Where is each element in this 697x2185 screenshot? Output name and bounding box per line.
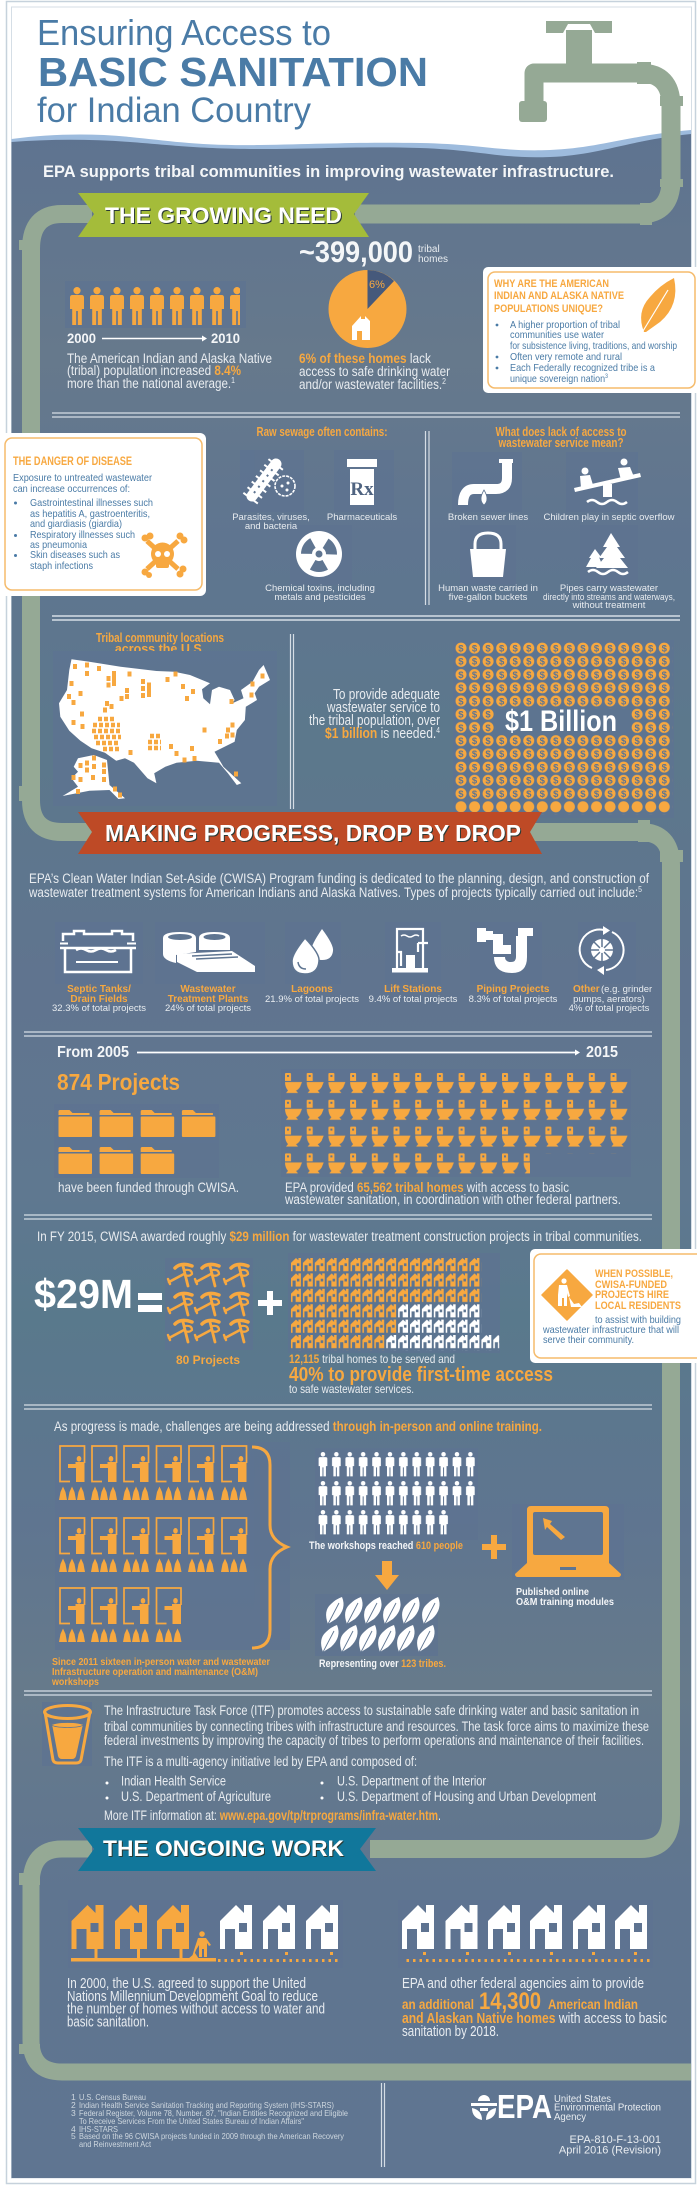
icon: parasites and viruses	[250, 460, 295, 499]
project type labels: Treatment Plants	[168, 994, 249, 1005]
project percentages: 24% of total projects	[165, 1003, 251, 1014]
service labels: Pipes carry wastewater	[560, 583, 658, 594]
banner: the ongoing work: THE ONGOING WORK	[103, 1836, 344, 1861]
icon: tools grid	[168, 1264, 248, 1342]
timeline 2000 to 2010: 2000	[67, 330, 96, 346]
title: for Indian Country	[37, 91, 311, 130]
text: one billion needed	[309, 687, 440, 742]
footnotes: Federal Register, Volume 78, Number. 87, "Indian Entities Recognized and Eligible	[79, 2108, 348, 2118]
ITF text: U.S. Department of the Interior	[337, 1774, 486, 1788]
text: one billion needed: 4	[436, 726, 440, 735]
icon: feather	[641, 278, 675, 332]
project types row	[52, 926, 652, 1014]
laptop caption: Published online	[516, 1586, 589, 1598]
2000 goal text: Nations Millennium Development Goal to reduce	[67, 1989, 318, 2005]
chart: one billion dollars: $$$$$$$$$$$$$$$$	[458, 776, 675, 787]
chart: one billion dollars: $$$$$$$$$$$$$$$$	[458, 749, 675, 760]
EPA logo: Agency	[554, 2112, 586, 2123]
service labels: Children play in septic overflow	[544, 512, 675, 523]
CWISA description	[28, 871, 649, 900]
chart: one billion dollars: $$$	[634, 723, 675, 734]
project percentages: 8.3% of total projects	[469, 994, 558, 1005]
project percentages: 32.3% of total projects	[52, 1003, 146, 1014]
callout: why unique	[483, 267, 697, 393]
document number: April 2016 (Revision)	[559, 2144, 661, 2156]
population text: 1	[231, 376, 235, 385]
ITF text: Indian Health Service	[121, 1774, 226, 1788]
65,562 homes: wastewater sanitation, in coordination with other federal partners.	[284, 1192, 621, 1207]
icon: skull and crossbones	[142, 532, 188, 578]
project type labels	[67, 984, 600, 1005]
EPA logo: Environmental Protection	[554, 2102, 661, 2114]
sewage labels: and bacteria	[245, 521, 298, 532]
icon: homes grid	[291, 1258, 499, 1350]
874 projects: have been funded through CWISA.	[58, 1179, 239, 1195]
disease text: staph infections	[30, 560, 93, 572]
callout: hire local residents: WHEN POSSIBLE,	[595, 1268, 673, 1280]
callout bullets: communities use water	[510, 329, 604, 341]
project type labels: Piping Projects	[477, 984, 550, 995]
workshop caption: workshops	[51, 1676, 99, 1688]
footnotes: 1	[71, 2092, 76, 2102]
workshop caption	[51, 1656, 270, 1688]
footnotes: IHS-STARS	[79, 2124, 118, 2134]
EPA logo: United States	[554, 2094, 611, 2105]
title	[37, 12, 428, 130]
14,300 homes panel	[402, 1905, 667, 2040]
footnotes: To Receive Services From the United States Bureau of Indian Affairs"	[79, 2116, 304, 2126]
workshop caption: Since 2011 sixteen in-person water and wastewater	[52, 1656, 270, 1668]
chart: one billion dollars: $$$	[458, 710, 499, 721]
disease text: Respiratory illnesses such	[30, 529, 135, 541]
65,562 homes: EPA provided 65,562 tribal homes with access to basic	[285, 1180, 569, 1195]
icon: glass of water	[44, 1706, 90, 1763]
project type labels: Drain Fields	[70, 994, 128, 1005]
EPA logo: EPA	[497, 2088, 552, 2125]
map of U.S.	[59, 659, 270, 799]
icon: construction sign	[542, 1270, 592, 1320]
equation: 29 million: $29M	[34, 1271, 133, 1317]
population text: more than the national average.	[67, 376, 258, 391]
sewage labels	[232, 512, 397, 603]
callout: hire local residents: LOCAL RESIDENTS	[595, 1300, 681, 1312]
icon: homes row	[402, 1905, 650, 1963]
callout bullets: Often very remote and rural	[510, 351, 622, 363]
panel: raw sewage contents: Raw sewage often contains:	[256, 425, 388, 439]
homes text: 2	[442, 377, 446, 386]
chart: one billion dollars: $$$	[458, 723, 499, 734]
icon: EPA symbol	[471, 2095, 497, 2120]
14,300 text: sanitation by 2018.	[402, 2024, 499, 2040]
training panel: The workshops reached 610 people	[309, 1540, 463, 1552]
14,300 text	[402, 1976, 667, 2040]
arrow down	[375, 1561, 399, 1590]
training panel	[51, 1418, 621, 1688]
65,562 homes	[284, 1073, 632, 1207]
brace	[252, 1447, 287, 1648]
callout heading: WHY ARE THE AMERICAN	[494, 278, 609, 290]
banner: the ongoing work	[78, 1828, 376, 1871]
footnotes: Indian Health Service Sanitation Tracking and Reporting System (IHS-STARS)	[79, 2100, 334, 2110]
callout: hire local residents: wastewater infrastructure that will	[542, 1324, 679, 1336]
icon: folders	[58, 1110, 215, 1174]
banner: the growing need	[78, 193, 369, 237]
homes text: and/or wastewater facilities.	[299, 377, 465, 392]
icon: people reached	[318, 1452, 479, 1536]
panel: lack of service: What does lack of access to	[496, 425, 627, 439]
icon: bucket	[470, 533, 506, 577]
icon: pine trees and stream	[586, 533, 628, 574]
disease text: can increase occurrences of:	[13, 483, 130, 495]
callout: danger of disease	[0, 433, 206, 596]
project percentages: 4% of total projects	[569, 1003, 650, 1014]
ITF text: U.S. Department of Housing and Urban Development	[337, 1789, 596, 1804]
project type labels: Other	[573, 984, 600, 995]
title: Ensuring Access to	[37, 12, 331, 53]
service labels: Broken sewer lines	[448, 512, 528, 523]
icon: pharmaceuticals bottle: Rx	[350, 479, 374, 500]
chart: one billion dollars: $$$$$$$$$$$$$$$$	[458, 736, 675, 747]
sewage labels: Chemical toxins, including	[265, 583, 375, 594]
laptop caption	[516, 1586, 614, 1608]
14,300 text: an additional	[402, 1996, 474, 2012]
icon: broken sewer	[463, 459, 513, 505]
project percentages: 9.4% of total projects	[369, 994, 458, 1005]
timeline 2005 to 2015: 2015	[586, 1044, 618, 1061]
workshop caption: Infrastructure operation and maintenance (O&M)	[52, 1666, 258, 1678]
population text: (tribal) population increased 8.4%	[67, 363, 241, 378]
sewage labels: Parasites, viruses,	[232, 512, 310, 523]
training panel: As progress is made, challenges are being addressed through in-person and online training.	[54, 1418, 542, 1434]
chart: one billion dollars	[455, 642, 675, 814]
text: one billion needed: $1 billion is needed.	[325, 726, 448, 742]
sewage labels: metals and pesticides	[274, 592, 366, 603]
callout bullets	[496, 319, 677, 385]
laptop caption: O&M training modules	[516, 1596, 614, 1608]
callout heading: INDIAN AND ALASKA NATIVE	[494, 290, 624, 302]
homes served text: 12,115 tribal homes to be served and	[289, 1352, 455, 1366]
training panel: Representing over 123 tribes.	[319, 1658, 446, 1670]
title: BASIC SANITATION	[38, 49, 428, 95]
equation: 29 million	[34, 1258, 553, 1396]
chart: one billion dollars: $$$$$$$$$$$$$$$$	[458, 657, 675, 668]
project percentages: 21.9% of total projects	[265, 994, 359, 1005]
service labels: without treatment	[572, 600, 646, 611]
ITF text: The ITF is a multi-agency initiative led by EPA and composed of:	[104, 1754, 417, 1769]
chart: one billion dollars: $1 Billion	[505, 705, 617, 738]
footnotes: 5	[71, 2131, 76, 2141]
document number	[559, 2134, 661, 2156]
chart: one billion dollars: $$$$$$$$$$$$$$$$	[458, 670, 675, 681]
14,300 text: and Alaskan Native homes with access to basic	[402, 2011, 667, 2027]
timeline 2005 to 2015	[57, 1044, 618, 1061]
2000 goal panel	[67, 1905, 340, 2030]
CWISA description: 5	[638, 885, 642, 894]
equation: 29 million: 80 Projects	[176, 1353, 240, 1367]
callout heading: POPULATIONS UNIQUE?	[494, 303, 603, 315]
project percentages: (e.g. grinder	[601, 984, 652, 995]
chart: one billion dollars: $$$$$$$$$$$$$$$$	[458, 789, 675, 800]
footnotes: 2	[71, 2100, 76, 2110]
icon: septic tank	[60, 931, 136, 972]
intro statement: EPA supports tribal communities in improving wastewater infrastructure.	[43, 163, 614, 181]
homes text: 6% of these homes lack	[299, 351, 431, 366]
panel: lack of service: wastewater service mean?	[498, 436, 624, 450]
icon: piping	[477, 928, 533, 973]
timeline 2000 to 2010: 2010	[211, 330, 240, 346]
callout: hire local residents: serve their community.	[543, 1334, 634, 1346]
footnotes: and Reinvestment Act	[79, 2139, 152, 2149]
callout: hire local residents	[530, 1249, 697, 1363]
footnotes: 3	[71, 2108, 76, 2118]
2000 goal text: In 2000, the U.S. agreed to support the United	[67, 1976, 306, 1992]
icon: toilets	[285, 1073, 632, 1174]
chart: one billion dollars: $$$	[634, 710, 675, 721]
service labels: directly into streams and waterways,	[543, 592, 675, 603]
population growth panel	[67, 287, 272, 391]
service labels: five-gallon buckets	[449, 592, 528, 603]
text: one billion needed: the tribal population, over	[309, 713, 440, 729]
icon: feathers	[321, 1597, 440, 1654]
icon: seesaw	[574, 458, 641, 504]
ITF text: U.S. Department of Agriculture	[121, 1789, 271, 1804]
pie chart 6%: 6%	[369, 279, 385, 291]
timeline 2005 to 2015: From 2005	[57, 1044, 129, 1061]
footnotes: U.S. Census Bureau	[79, 2092, 146, 2102]
icon: sixteen workshops	[59, 1446, 247, 1642]
icon: faucet	[355, 21, 683, 225]
callout bullets: 3	[605, 374, 609, 380]
text: one billion needed: To provide adequate	[333, 687, 440, 703]
homes text: access to safe drinking water	[299, 364, 450, 379]
callout: danger of disease: THE DANGER OF DISEASE	[13, 456, 132, 468]
panel: raw sewage contents	[232, 425, 397, 603]
disease text: and giardiasis (giardia)	[30, 518, 122, 530]
pie chart 6%	[328, 270, 406, 348]
icon: laptop	[515, 1506, 621, 1577]
footnotes: Based on the 96 CWISA projects funded in 2009 through the American Recovery	[79, 2131, 345, 2141]
homes statistic panel	[299, 236, 450, 392]
population text: The American Indian and Alaska Native	[67, 351, 272, 366]
icon: lift station	[392, 929, 428, 972]
disease text: as hepatitis A, gastroenteritis,	[30, 508, 150, 520]
14,300 text: 14,300	[479, 1988, 541, 2015]
874 projects: 874 Projects	[57, 1069, 180, 1095]
icon: pharmaceuticals bottle	[347, 459, 377, 505]
chart: one billion dollars: $$$$$$$$$$$$$$$$	[458, 644, 675, 654]
2000 goal text	[67, 1976, 325, 2030]
population text	[67, 351, 272, 391]
map panel: tribal community locations: across the U.S.	[115, 642, 205, 656]
number of homes: tribal	[418, 244, 440, 255]
chart: one billion dollars: $$$$$$$$$$$$$$$$	[458, 762, 675, 774]
callout bullets: Each Federally recognized tribe is a	[510, 362, 655, 374]
number of homes: ~399,000	[299, 236, 413, 269]
callout heading	[494, 278, 624, 315]
FY 2015 awards: In FY 2015, CWISA awarded roughly $29 million for wastewater treatment construction projects in tribal communities.	[37, 1229, 642, 1244]
icon: radiation	[296, 531, 342, 577]
callout: hire local residents: CWISA-FUNDED	[595, 1279, 667, 1291]
chart: one billion dollars: $$$$$$$$$$$$$$$$	[458, 683, 675, 694]
disease text: Exposure to untreated wastewater	[13, 472, 152, 484]
EPA logo	[471, 2088, 661, 2125]
14,300 text: EPA and other federal agencies aim to provide	[402, 1976, 644, 1992]
homes served text: to safe wastewater services.	[289, 1382, 414, 1396]
text: one billion needed: wastewater service to	[326, 700, 440, 716]
footnotes	[71, 2092, 348, 2149]
disease text: Gastrointestinal illnesses such	[30, 497, 153, 509]
project percentages	[52, 984, 652, 1014]
callout bullets: unique sovereign nation	[510, 373, 622, 385]
tribal location markers	[67, 662, 264, 798]
chart: one billion dollars: $$$$$$$$$$$$$$$$	[458, 696, 675, 707]
icon: lagoon drops	[292, 929, 333, 974]
homes served text	[289, 1352, 553, 1396]
project percentages: pumps, aerators)	[573, 994, 645, 1005]
map panel: tribal community locations	[59, 631, 270, 799]
project type labels: Lagoons	[291, 984, 333, 995]
14,300 text: American Indian	[548, 1996, 638, 2012]
service labels	[438, 512, 675, 611]
panel: lack of service	[438, 425, 675, 611]
callout: hire local residents: PROJECTS HIRE	[595, 1289, 669, 1301]
document number: EPA-810-F-13-001	[569, 2134, 661, 2146]
service labels: Human waste carried in	[438, 583, 538, 594]
icon: other equipment	[580, 926, 624, 975]
disease text	[13, 472, 153, 572]
project type labels: Septic Tanks/	[67, 984, 131, 995]
icon: homes being connected	[71, 1905, 340, 1963]
timeline 2000 to 2010	[67, 330, 240, 346]
homes served text: 40% to provide first-time access	[289, 1364, 553, 1386]
project type labels: Wastewater	[180, 984, 236, 995]
banner: making progress: MAKING PROGRESS, DROP BY DROP	[105, 820, 521, 846]
banner: making progress	[78, 812, 542, 854]
disease text: as pneumonia	[30, 539, 87, 551]
footnotes: 4	[71, 2124, 76, 2134]
callout bullets: A higher proportion of tribal	[510, 319, 620, 331]
icon: row of people	[69, 287, 240, 325]
ITF text	[104, 1703, 649, 1823]
number of homes: homes	[418, 254, 448, 265]
homes text	[299, 351, 450, 392]
2000 goal text: the number of homes without access to water and	[67, 2002, 325, 2018]
ITF text: More ITF information at: www.epa.gov/tp/trprograms/infra-water.htm.	[104, 1808, 441, 1823]
sewage labels: Pharmaceuticals	[327, 512, 397, 523]
disease text: Skin diseases such as	[30, 549, 120, 561]
2000 goal text: basic sanitation.	[67, 2014, 149, 2030]
banner: the growing need: THE GROWING NEED	[105, 203, 342, 228]
plus sign	[482, 1535, 506, 1559]
project type labels: Lift Stations	[384, 984, 442, 995]
icon: treatment plant	[163, 932, 255, 972]
map panel: tribal community locations: Tribal community locations	[96, 631, 224, 645]
callout: hire local residents: to assist with building	[595, 1314, 681, 1326]
874 projects	[57, 1069, 239, 1195]
